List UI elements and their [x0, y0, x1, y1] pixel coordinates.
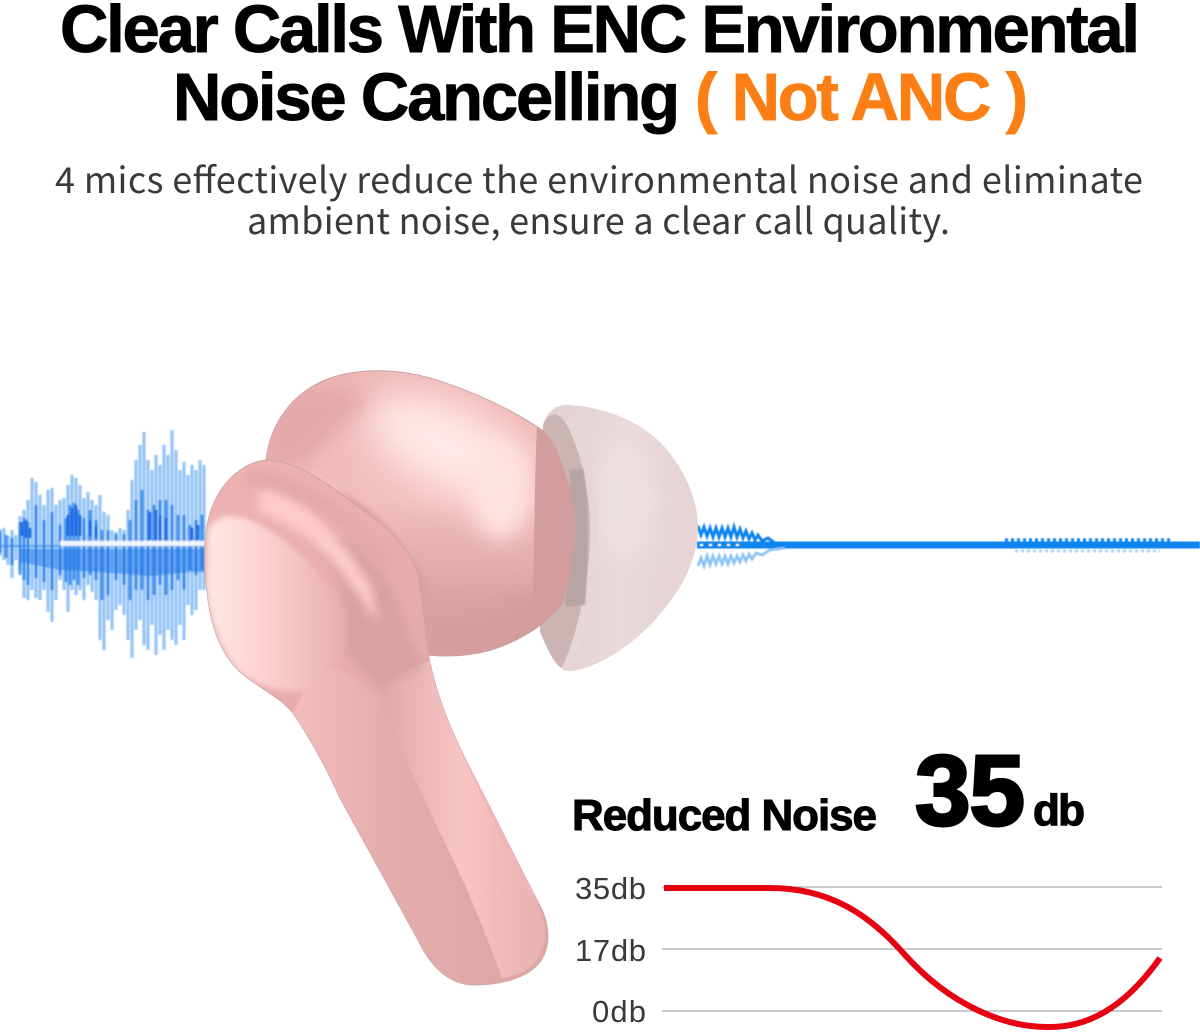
chart axis labels: 17db	[575, 933, 646, 968]
reduced noise heading: Reduced Noise	[572, 791, 877, 840]
line chart: noise reduction	[575, 871, 1162, 1029]
clean sound wave, right of earbud	[697, 526, 1200, 566]
noisy sound wave, left of earbud	[0, 430, 210, 658]
earbud neck band	[530, 427, 575, 632]
chart axis labels	[575, 871, 646, 1029]
35 db figure: db	[1033, 786, 1085, 835]
reduced noise heading	[572, 735, 1085, 847]
red noise curve	[664, 888, 1160, 1027]
ear tip	[540, 405, 698, 671]
earbud front lobe and stem	[205, 460, 548, 985]
earbud back body	[260, 371, 575, 660]
lobe face highlight	[207, 516, 345, 692]
35 db figure: 35	[915, 735, 1025, 847]
35 db figure	[915, 735, 1085, 847]
stem shading	[293, 671, 476, 985]
subtitle text	[55, 152, 1143, 245]
subtitle text: ambient noise, ensure a clear call quality.	[247, 193, 950, 245]
title: Noise Cancelling	[173, 60, 680, 135]
subtitle text: 4 mics effectively reduce the environmental noise and eliminate	[55, 152, 1143, 204]
title	[60, 0, 1140, 135]
earbud	[205, 371, 698, 985]
title highlight: not ANC: ( Not ANC )	[695, 60, 1028, 135]
chart axis labels: 35db	[575, 871, 646, 906]
lobe ridge highlight	[258, 486, 378, 625]
chart axis labels: 0db	[592, 994, 646, 1029]
